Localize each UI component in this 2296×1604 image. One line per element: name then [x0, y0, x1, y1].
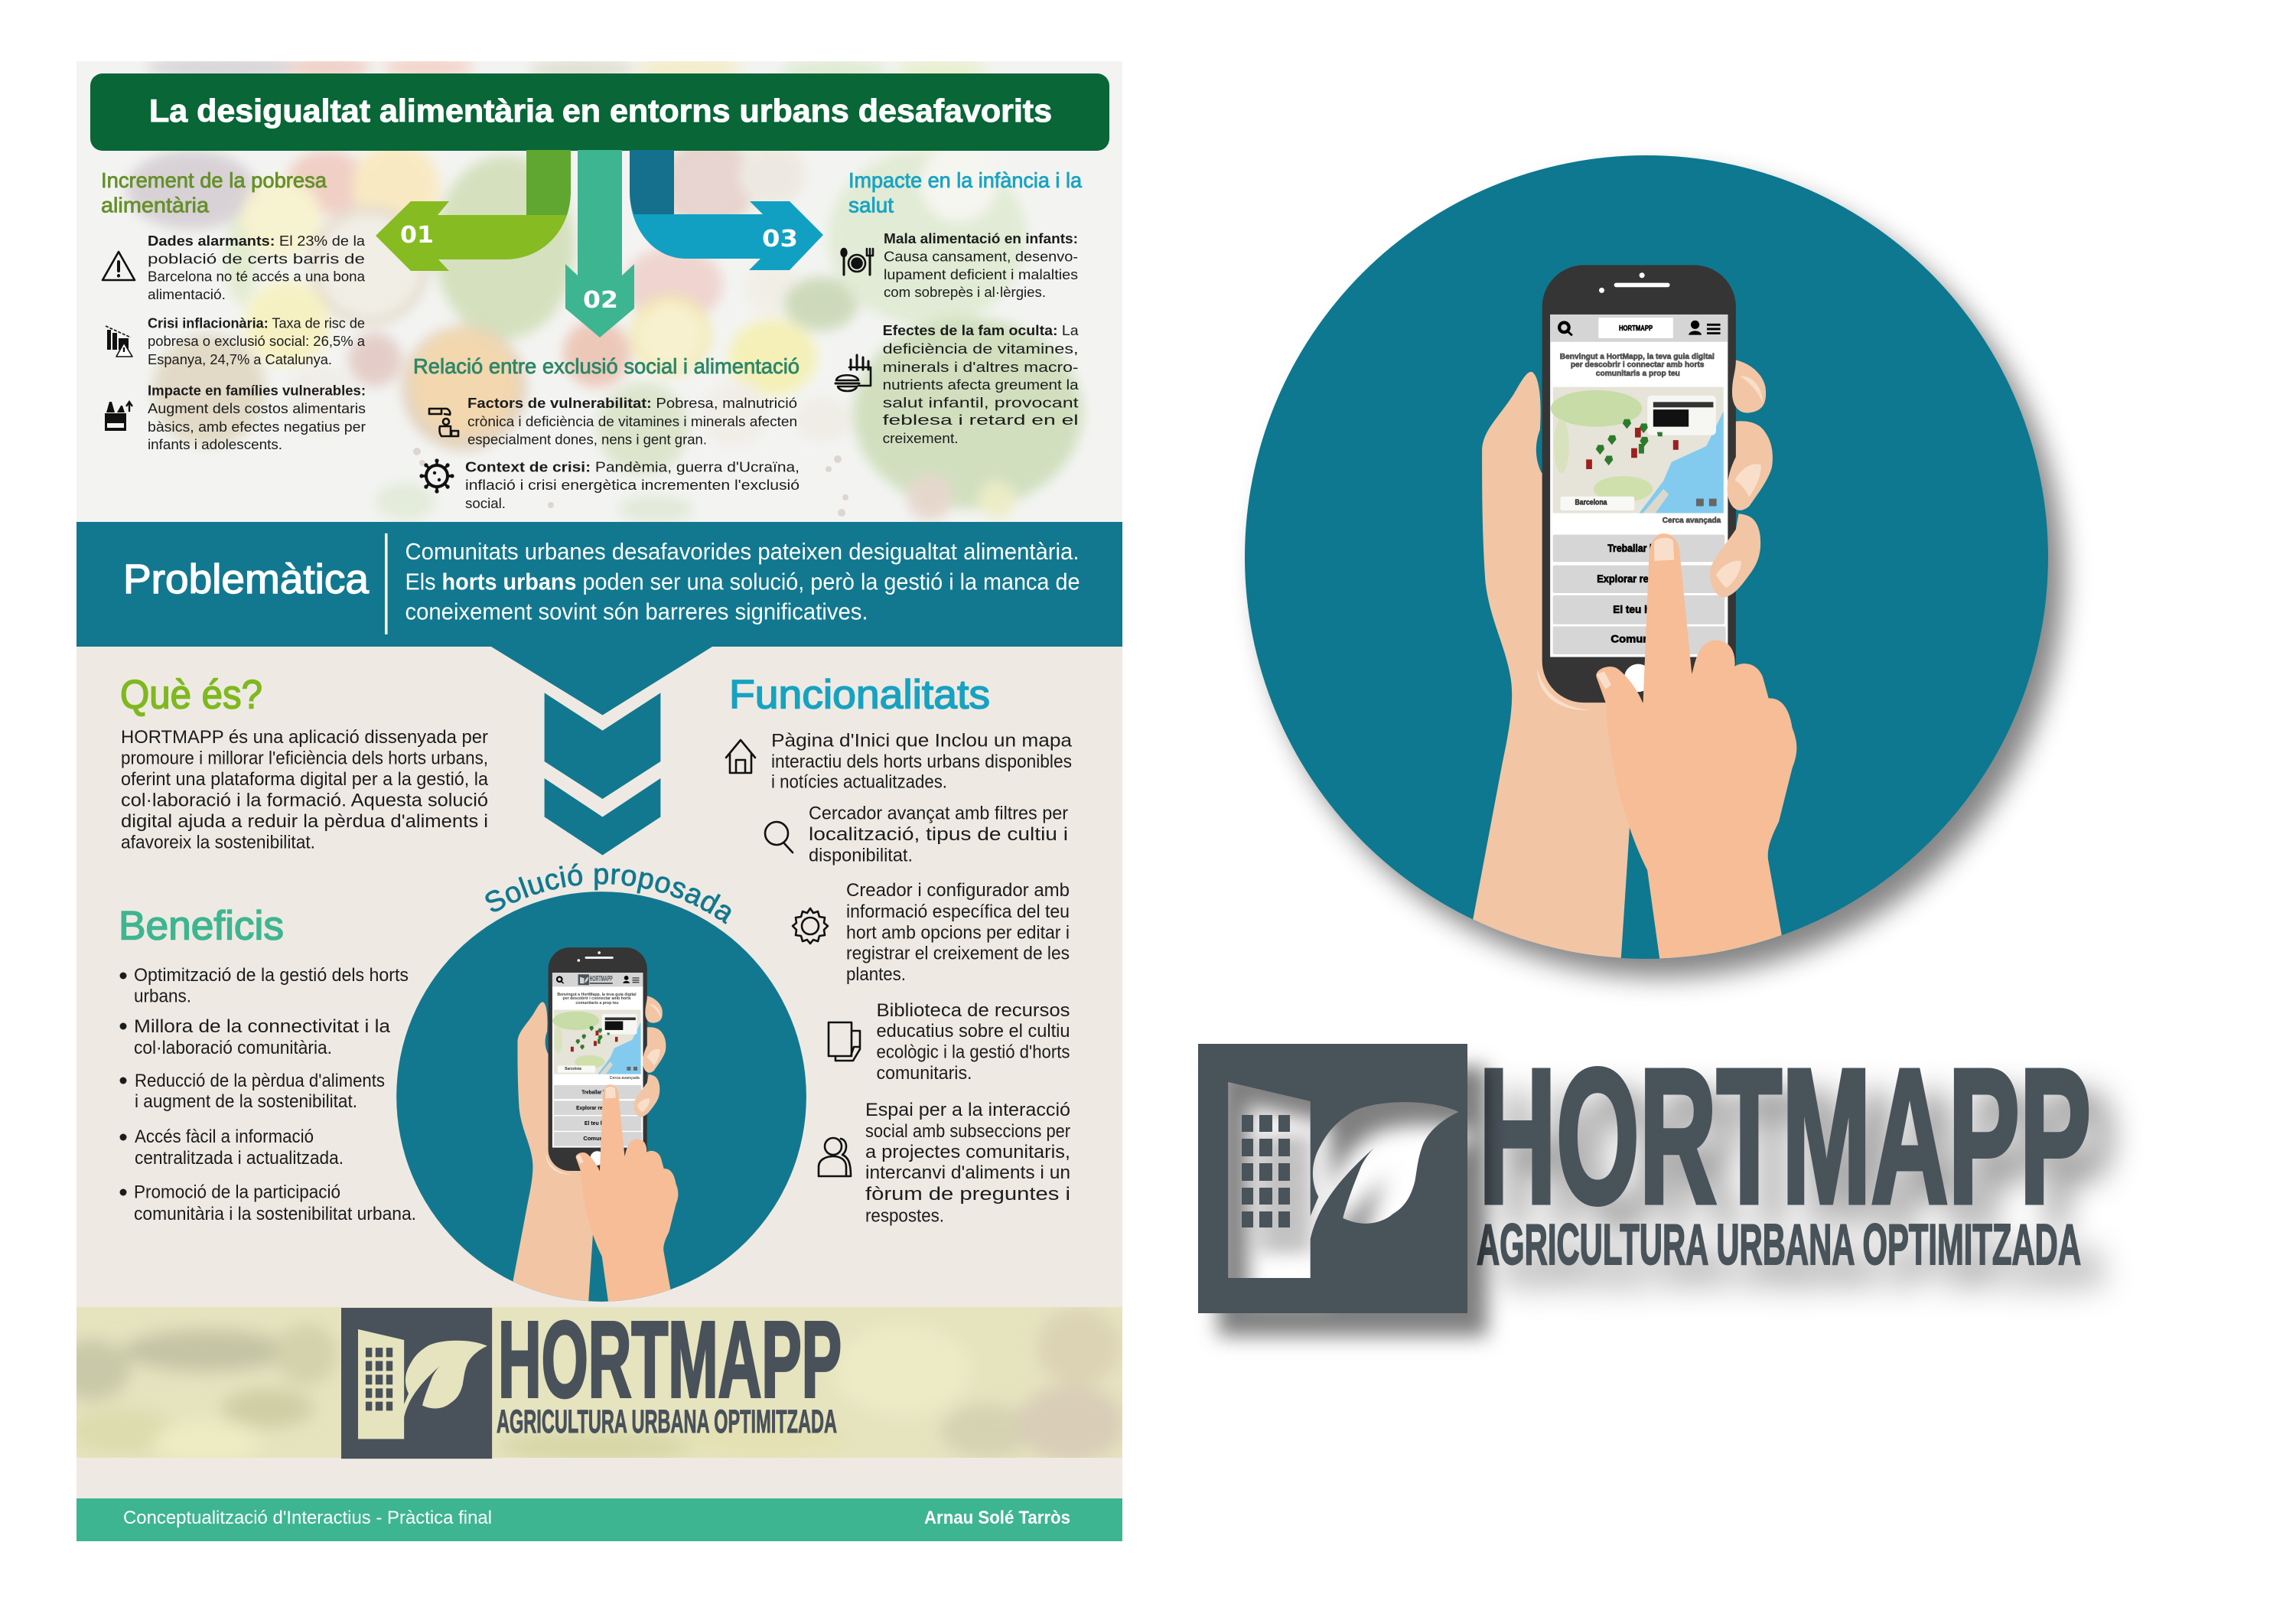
bullet list: beneficis: urbans.	[134, 986, 191, 1007]
illustration: hand holding phone (poster): comunitaris a prop teu	[575, 1001, 619, 1006]
illustration: large circle with hand holding phone	[1245, 155, 2048, 967]
text: factors de vulnerabilitat: especialment dones, nens i gent gran.	[467, 432, 707, 448]
text: efectes de la fam oculta: nutrients afecta greument la	[883, 377, 1079, 393]
arrow 03: blue to the right: 03	[762, 226, 798, 253]
text: espai social: a projectes comunitaris,	[865, 1142, 1070, 1162]
text: que es description: afavoreix la sostenibilitat.	[121, 833, 315, 853]
illustration: hand holding phone (poster): per descobrir i connectar amb horts	[563, 996, 631, 1001]
heading 03: Impacte en la infància i la	[848, 168, 1083, 192]
text: mala alimentacio: Causa cansament, desenvo-	[884, 248, 1078, 265]
text: que es description: oferint una plataforma digital per a la gestió, la	[121, 769, 489, 790]
heading 01: alimentària	[101, 193, 210, 217]
icon: falling bars with warning	[106, 326, 132, 357]
illustration: hand holding phone (poster): HORTMAPP	[590, 975, 613, 983]
text: creador: registrar el creixement de les	[846, 944, 1070, 964]
heading 01	[101, 168, 327, 217]
text: mala alimentacio: com sobrepès i al·lèrgies.	[884, 284, 1046, 300]
icon: rising food costs	[105, 402, 132, 431]
text: factors de vulnerabilitat	[467, 395, 797, 448]
section 03: impacte en la infancia	[835, 168, 1083, 446]
text: efectes de la fam oculta: creixement.	[883, 430, 959, 446]
bullet list: beneficis: Optimització de la gestió dels horts	[134, 965, 409, 986]
illustration: large circle with hand holding phone: Benvingut a HortMapp, la teva guia digital	[1560, 352, 1715, 361]
text: efectes de la fam oculta: deficiència de vitamines,	[883, 341, 1079, 357]
section: beneficis	[119, 903, 416, 1224]
text: efectes de la fam oculta: salut infantil, provocant	[883, 395, 1079, 410]
panel: beige solution background	[77, 647, 1122, 1498]
heading 03: salut	[848, 193, 894, 217]
illustration: large circle with hand holding phone: comunitaris a prop teu	[1596, 369, 1680, 378]
text: impacte en families: bàsics, amb efectes negatius per	[148, 419, 366, 435]
heading 03	[848, 168, 1083, 217]
text: context de crisi: inflació i crisi energètica incrementen l'exclusió	[465, 477, 800, 493]
illustration: hand holding phone (poster): Treballar hort	[581, 1089, 613, 1095]
text: que es description: digital ajuda a reduir la pèrdua d'aliments i	[121, 811, 488, 832]
text: que es description: promoure i millorar l'eficiència dels horts urbans,	[121, 748, 488, 768]
illustration: hand holding phone (poster): Explorar recursos	[576, 1105, 619, 1111]
text: problem statement: Els horts urbans poden ser una solució, però la gestió i la manca de	[405, 569, 1080, 595]
logo mark large	[1198, 1044, 1467, 1313]
illustration: large circle with hand holding phone: El teu hort	[1613, 603, 1665, 615]
illustration: hand holding phone (poster)	[396, 892, 806, 1306]
text: dades alarmants	[148, 233, 366, 302]
text: cercador	[809, 804, 1068, 866]
panel: infographic poster	[77, 61, 1122, 1541]
section: funcionalitats	[726, 672, 1073, 1227]
illustration: hand holding phone (poster): Barcelona	[565, 1067, 581, 1071]
text: biblioteca: Biblioteca de recursos	[877, 1000, 1070, 1021]
text: que es description	[121, 727, 489, 853]
banner: field photo with logo	[77, 1307, 1122, 1459]
text: mala alimentacio: lupament deficient i malalties	[884, 266, 1078, 282]
illustration: hand holding phone (poster): Benvingut a HortMapp, la teva guia digital	[557, 993, 637, 997]
text: espai social: Espai per a la interacció	[865, 1100, 1070, 1120]
section 01: increment de la pobresa	[101, 168, 366, 452]
logo mark	[341, 1308, 492, 1459]
text: context de crisi	[465, 459, 800, 511]
footer: course name: Conceptualització d'Interactius - Pràctica final	[123, 1508, 492, 1528]
text: cercador: Cercador avançat amb filtres per	[809, 804, 1068, 824]
bullet list: beneficis	[119, 965, 416, 1224]
tagline: AGRICULTURA URBANA OPTIMITZADA	[497, 1404, 837, 1440]
logo: hortmapp in banner	[341, 1299, 842, 1459]
bullet list: beneficis: Accés fàcil a informació	[135, 1126, 314, 1147]
text: context de crisi: social.	[465, 495, 506, 511]
illustration: large circle with hand holding phone: Cerca avançada	[1663, 517, 1721, 525]
text: cercador: localització, tipus de cultiu i	[809, 824, 1068, 845]
footer: author: Arnau Solé Tarròs	[924, 1508, 1070, 1528]
wordmark and tagline large	[1477, 1029, 2091, 1276]
banner: problematica	[77, 522, 1122, 647]
text: crisi inflacionaria: Crisi inflacionària: Taxa de risc de	[148, 315, 365, 331]
illustration: large circle with hand holding phone: HORTMAPP	[1619, 324, 1653, 333]
text: efectes de la fam oculta: feblesa i retard en el	[883, 412, 1079, 428]
text: mala alimentacio	[884, 230, 1078, 300]
text: creador: Creador i configurador amb	[846, 880, 1070, 901]
icon: gear	[793, 908, 828, 944]
bullet list: beneficis: Reducció de la pèrdua d'aliments	[135, 1071, 385, 1091]
icon: warning triangle	[103, 252, 135, 280]
icon: vulnerable hands	[429, 409, 458, 436]
illustration: large circle with hand holding phone: per descobrir i connectar amb horts	[1571, 360, 1705, 370]
text: espai social: social amb subseccions per	[865, 1121, 1070, 1142]
heading: problematica: Problemàtica	[123, 556, 370, 602]
heading 02: Relació entre exclusió social i alimentació	[413, 354, 800, 378]
icon: documents	[829, 1022, 860, 1061]
bullet list: beneficis: col·laboració comunitària.	[134, 1038, 332, 1058]
illustration: hand holding phone (poster): Cerca avançada	[610, 1076, 640, 1081]
text: pagina d'inici: Pàgina d'Inici que Inclou un mapa	[771, 730, 1073, 751]
text: crisi inflacionaria: Espanya, 24,7% a Catalunya.	[148, 351, 332, 367]
header: main title: La desigualtat alimentària en entorns urbans desafavorits	[149, 93, 1052, 129]
text: espai social: intercanvi d'aliments i un	[865, 1162, 1070, 1183]
section 02: relacio entre exclusio i alimentacio	[413, 354, 800, 511]
text: creador	[846, 880, 1070, 985]
icon: magnifier	[765, 822, 793, 853]
icon: crisis virus gear	[419, 458, 454, 494]
heading: funcionalitats: Funcionalitats	[729, 672, 990, 718]
heading: beneficis: Beneficis	[119, 903, 284, 949]
text: cercador: disponibilitat.	[809, 845, 913, 866]
arrow 01: green to the left	[376, 150, 571, 271]
arrow 01: green to the left: 01	[400, 222, 434, 249]
text: context de crisi: Context de crisi: Pandèmia, guerra d'Ucraïna,	[465, 459, 800, 475]
text: dades alarmants: Barcelona no té accés a una bona	[148, 269, 366, 285]
text: pagina d'inici: interactiu dels horts urbans disponibles	[771, 751, 1072, 772]
text: mala alimentacio: Mala alimentació en infants:	[884, 230, 1078, 246]
text: creador: informació específica del teu	[846, 901, 1070, 922]
text: espai social: respostes.	[865, 1206, 944, 1227]
text: pagina d'inici	[771, 730, 1073, 793]
illustration: hand holding phone (poster): Comunitat	[583, 1136, 612, 1142]
heading: que es: Què és?	[120, 672, 262, 718]
arrow 03: blue to the right	[630, 150, 823, 270]
illustration: large circle with hand holding phone: Comunitat	[1610, 633, 1667, 645]
arrow 02: teal downwards: 02	[583, 287, 618, 314]
bullet list: beneficis: comunitària i la sostenibilitat urbana.	[134, 1204, 416, 1224]
icon: burger and fries	[835, 355, 871, 391]
bullet list: beneficis: Promoció de la participació	[134, 1182, 340, 1203]
wordmark: HORTMAPP	[498, 1299, 842, 1420]
icon: people	[819, 1138, 851, 1176]
text: problem statement: Comunitats urbanes desafavorides pateixen desigualtat alimentària.	[405, 538, 1079, 565]
header: main title	[90, 73, 1109, 151]
curved title: solucio proposada: Solució proposada	[485, 863, 731, 924]
arrow: chevrons pointing down	[491, 647, 712, 856]
heading 01: Increment de la pobresa	[101, 168, 327, 192]
illustration: hand holding phone (poster): El teu hort	[585, 1120, 611, 1126]
text: que es description: col·laboració i la formació. Aquesta solució	[121, 791, 488, 811]
section: que es	[120, 672, 489, 853]
arrow 02: teal downwards	[565, 150, 634, 337]
text: impacte en families: Augment dels costos alimentaris	[148, 400, 366, 416]
text: problem statement: coneixement sovint són barreres significatives.	[405, 598, 868, 624]
text: problem statement	[405, 538, 1080, 624]
text: pagina d'inici: i notícies actualitzades.	[771, 772, 947, 793]
text: biblioteca: comunitaris.	[877, 1063, 972, 1084]
illustration: large circle with hand holding phone: Explorar recursos	[1597, 572, 1681, 585]
illustration: large circle with hand holding phone: Treballar hort	[1607, 542, 1668, 554]
text: factors de vulnerabilitat: crònica i deficiència de vitamines i minerals afecten	[467, 413, 797, 429]
text: creador: plantes.	[846, 964, 906, 985]
image: blurred vegetable field	[54, 1307, 1125, 1464]
bullet list: beneficis: i augment de la sostenibilitat.	[135, 1091, 357, 1112]
text: creador: hort amb opcions per editar i	[846, 922, 1070, 943]
text: efectes de la fam oculta: minerals i d'altres macro-	[883, 359, 1079, 375]
bullet list: beneficis: Millora de la connectivitat i la	[134, 1016, 391, 1037]
footer bar	[77, 1498, 1122, 1541]
text: biblioteca	[877, 1000, 1070, 1084]
text: biblioteca: ecològic i la gestió d'horts	[877, 1042, 1070, 1062]
text: dades alarmants: alimentació.	[148, 286, 226, 302]
text: crisi inflacionaria: pobresa o exclusió social: 26,5% a	[148, 333, 366, 349]
text: impacte en families: Impacte en famílies vulnerables:	[148, 383, 366, 399]
bullet list: beneficis: centralitzada i actualitzada.	[135, 1148, 344, 1169]
icon: house	[726, 740, 755, 773]
text: biblioteca: educatius sobre el cultiu	[877, 1021, 1070, 1042]
text: impacte en families: infants i adolescents.	[148, 436, 282, 452]
text: dades alarmants: població de certs barris de	[148, 251, 365, 267]
text: efectes de la fam oculta	[883, 322, 1079, 446]
illustration: large circle with hand holding phone: Barcelona	[1575, 498, 1607, 507]
text: que es description: HORTMAPP és una aplicació dissenyada per	[121, 727, 488, 748]
text: espai social: fòrum de preguntes i	[865, 1184, 1070, 1205]
logo: large hortmapp with shadow	[1198, 1029, 2091, 1313]
text: dades alarmants: Dades alarmants: El 23% de la	[148, 233, 366, 249]
panel: food photo background	[77, 55, 1122, 523]
text: factors de vulnerabilitat: Factors de vulnerabilitat: Pobresa, malnutrició	[467, 395, 797, 411]
text: impacte en families	[148, 383, 366, 452]
text: crisi inflacionaria	[148, 315, 366, 367]
text: efectes de la fam oculta: Efectes de la fam oculta: La	[883, 322, 1079, 338]
icon: plate and cutlery	[842, 249, 873, 275]
text: espai social	[865, 1100, 1070, 1227]
